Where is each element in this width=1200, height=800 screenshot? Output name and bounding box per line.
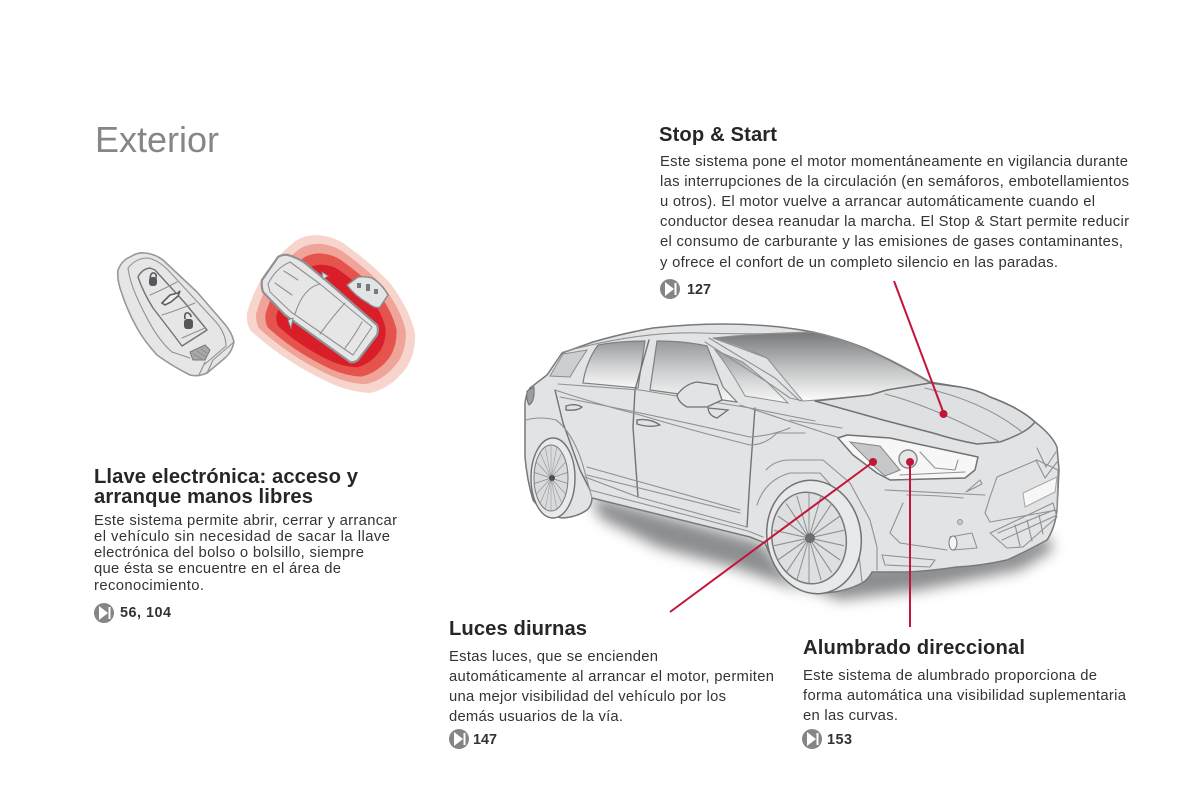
taillight [527, 387, 534, 405]
text block: Luces diurnas description: automáticamente al arrancar el motor, permiten [449, 669, 774, 685]
zone: middle [256, 244, 406, 384]
quarter window [715, 350, 788, 403]
side window front [650, 341, 737, 402]
car body [525, 324, 1059, 593]
title: Exterior [95, 119, 219, 160]
text block: Alumbrado direccional description: en las curvas. [803, 708, 898, 724]
panel: Alumbrado direccional [802, 637, 1127, 749]
text block: Luces diurnas description: Estas luces, que se encienden [449, 649, 658, 665]
illustration: car [525, 324, 1059, 601]
text block: Llave electrónica description: Este sistema permite abrir, cerrar y arrancar [94, 513, 397, 529]
text block: Alumbrado direccional description: forma automática una visibilidad suplementaria [803, 688, 1127, 704]
panel: Llave electrónica [94, 466, 397, 623]
car ground shadow [590, 495, 1053, 600]
text block: Llave electrónica description: reconocimiento. [94, 578, 204, 594]
heading: Llave electrónica: Llave electrónica: acceso y [94, 466, 359, 488]
page reference: 147 [449, 729, 497, 749]
headlight [838, 435, 978, 480]
door handles [566, 405, 660, 426]
text block: Llave electrónica description: que ésta se encuentre en el área de [94, 561, 341, 577]
windshield [713, 332, 930, 401]
heading: Llave electrónica [94, 466, 359, 508]
zone: inner [265, 253, 397, 377]
panel: Stop & Start [659, 124, 1129, 299]
door and body lines [526, 332, 885, 582]
icon: open lock [184, 313, 193, 329]
page reference: 127: 127 [687, 282, 711, 298]
leader line and dot: Alumbrado direccional [906, 458, 914, 627]
front wheel [758, 473, 870, 601]
text block: Stop & Start description: u otros). El motor vuelve a arrancar automáticamente cuando el [660, 194, 1095, 210]
zone: core [276, 265, 386, 367]
text block: Stop & Start description [660, 154, 1129, 271]
illustration: detection zone with car and key [247, 235, 415, 393]
page reference: 56, 104 [94, 603, 171, 623]
icon: lock [149, 273, 157, 286]
text block: Luces diurnas description: demás usuarios de la vía. [449, 709, 623, 725]
emergency key [190, 345, 210, 360]
page reference: 153 [802, 729, 852, 749]
text block: Llave electrónica description [94, 513, 397, 594]
leader line and dot: Stop & Start [894, 281, 948, 418]
icon: boot [162, 291, 180, 305]
zone: outer [247, 235, 415, 393]
door mirror [677, 382, 728, 418]
text block: Stop & Start description: el consumo de carburante y las emisiones de gases contaminantes, [660, 234, 1123, 250]
heading: Llave electrónica: arranque manos libres [94, 486, 313, 508]
page reference: 147: 147 [473, 732, 497, 748]
bumper and grille [882, 448, 1058, 567]
page reference: 127 [660, 279, 711, 299]
side window rear [583, 341, 645, 388]
heading: Alumbrado direccional: Alumbrado direccional [803, 637, 1025, 659]
text block: Alumbrado direccional description [803, 668, 1127, 724]
leader line and dot: Luces diurnas [670, 458, 877, 612]
text block: Alumbrado direccional description: Este sistema de alumbrado proporciona de [803, 668, 1097, 684]
text block: Stop & Start description: conductor desea reanudar la marcha. El Stop & Start permite reducir [660, 214, 1129, 230]
heading: Luces diurnas: Luces diurnas [449, 618, 587, 640]
text block: Luces diurnas description: una mejor visibilidad del vehículo por los [449, 689, 726, 705]
text block: Llave electrónica description: el vehículo sin necesidad de sacar la llave [94, 529, 390, 545]
hood [815, 383, 1035, 444]
text block: Luces diurnas description [449, 649, 774, 725]
rear wheel [531, 438, 575, 518]
small car top view [262, 255, 378, 362]
page reference: 153: 153 [827, 732, 852, 748]
rear windscreen [550, 350, 587, 377]
page reference: 56, 104: 56, 104 [120, 605, 171, 621]
panel: Luces diurnas [449, 618, 774, 749]
text block: Stop & Start description: las interrupciones de la circulación (en semáforos, embotellamientos [660, 174, 1129, 190]
illustration: electronic key fob [118, 253, 234, 376]
text block: Stop & Start description: Este sistema pone el motor momentáneamente en vigilancia durante [660, 154, 1128, 170]
small key [347, 277, 388, 308]
text block: Stop & Start description: y ofrece el confort de un completo silencio en las paradas. [660, 255, 1058, 271]
text block: Llave electrónica description: electrónica del bolso o bolsillo, siempre [94, 545, 364, 561]
heading: Stop & Start: Stop & Start [659, 124, 777, 146]
